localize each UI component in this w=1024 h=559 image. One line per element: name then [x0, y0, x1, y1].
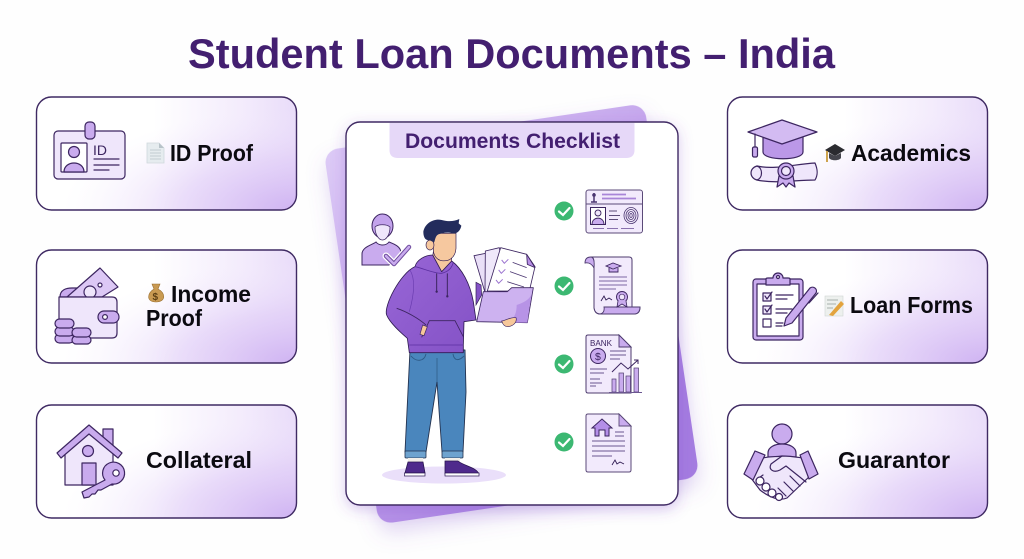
- title: Student Loan Documents – India: [188, 30, 836, 77]
- panel: ID Proof: [36, 97, 296, 210]
- hand in pocket: [420, 325, 427, 336]
- icon: memo emoji: [825, 296, 844, 316]
- heading pill: Documents Checklist: [405, 130, 620, 153]
- panel: Income Proof: [36, 250, 296, 363]
- label: Guarantor: Guarantor: [838, 447, 950, 473]
- illustration: student holding folder: [382, 219, 535, 483]
- face: [433, 233, 456, 261]
- hair: [423, 219, 461, 242]
- icon: graduation cap and diploma: [748, 120, 817, 187]
- label: Loan Forms: Loan Forms: [850, 292, 973, 318]
- icon: graduation cap emoji: [825, 144, 845, 162]
- label: Collateral: Collateral: [146, 447, 252, 473]
- icon: verified user: [362, 214, 409, 265]
- icon: ID badge: [54, 122, 125, 179]
- icon: bank statement: [586, 335, 642, 393]
- panel: Academics: [728, 97, 988, 210]
- icon: property document: [586, 414, 631, 472]
- label: Academics: Academics: [851, 140, 971, 166]
- icon: check 2: [554, 276, 574, 296]
- panel: tilted backing sheet: [324, 103, 699, 525]
- icon: check 4: [554, 432, 574, 452]
- icon: clipboard and pen: [753, 273, 818, 340]
- label: Income Proof: Proof: [146, 305, 202, 331]
- jeans: [405, 350, 466, 462]
- heading pill: [390, 123, 634, 158]
- upper body, drawn on a 3x grid: [386, 219, 535, 353]
- icon: wallet with cash and coins: [55, 268, 119, 344]
- icon: guarantor handshake: [744, 424, 818, 500]
- label: ID Proof: ID Proof: [170, 140, 253, 166]
- panel: Collateral: [36, 405, 296, 518]
- icon: house and key: [57, 425, 125, 498]
- papers: [474, 248, 535, 292]
- icon: bank statement: $: [595, 351, 601, 363]
- icon: money bag emoji: [149, 284, 164, 303]
- hand on folder: [502, 317, 516, 327]
- hoodie: [386, 255, 476, 353]
- icon: identity card document: [586, 190, 642, 233]
- icon: ID badge: ID: [93, 142, 107, 158]
- panel: Loan Forms: [728, 250, 988, 363]
- floor shadow: [382, 466, 506, 484]
- shoes: [404, 461, 479, 476]
- icon: money bag emoji: $: [152, 292, 158, 303]
- panel: documents checklist: [346, 122, 678, 505]
- panel: Guarantor: [728, 405, 988, 518]
- neck: [433, 252, 452, 273]
- icon: check 1: [554, 202, 574, 220]
- label: Income Proof: Income: [171, 281, 251, 307]
- sleeve behind folder: [476, 282, 482, 305]
- icon: degree scroll: [585, 257, 640, 314]
- icon: document emoji: [147, 143, 164, 163]
- icon: bank statement: BANK: [590, 338, 612, 348]
- folder: [477, 288, 533, 323]
- icon: check 3: [554, 354, 574, 374]
